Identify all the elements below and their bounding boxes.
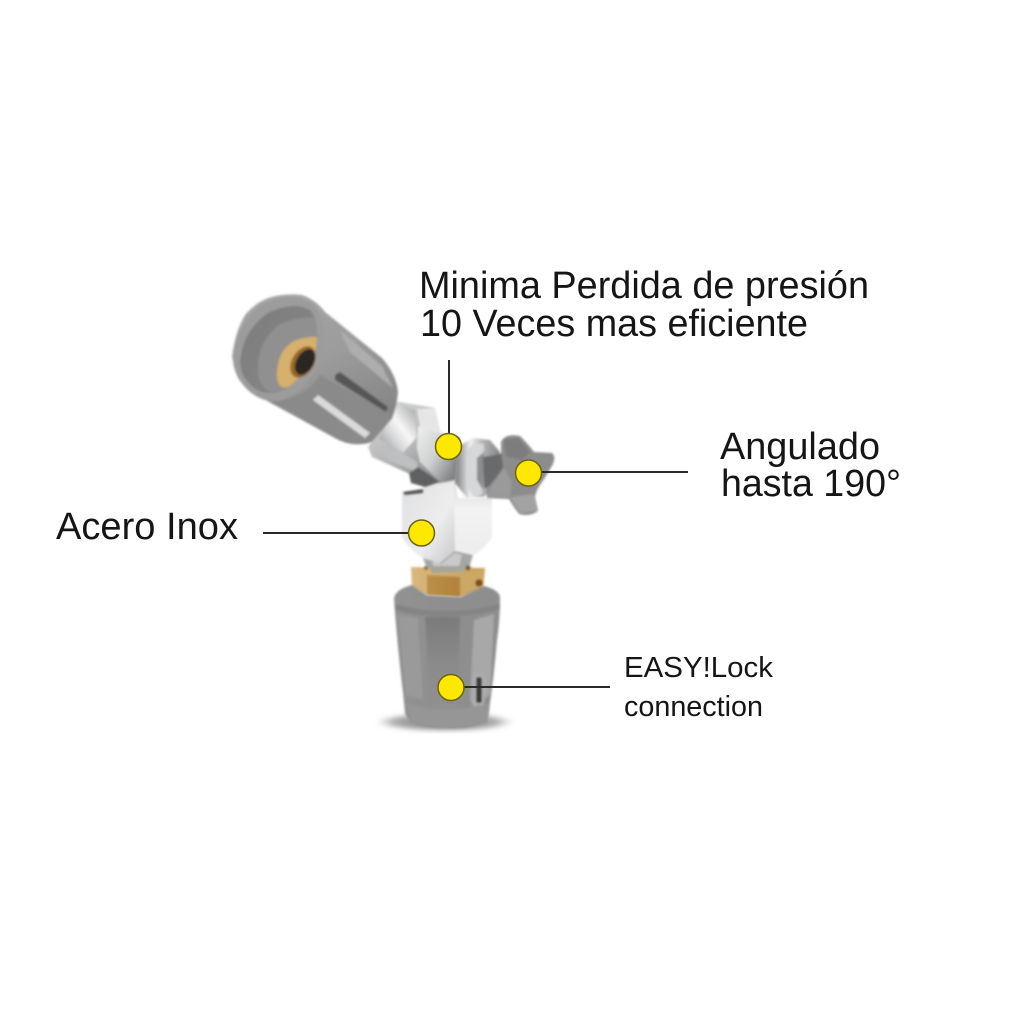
shadow under base	[375, 712, 515, 732]
leader: angle	[529, 471, 688, 473]
leader: pressure	[448, 360, 450, 445]
nozzle inner shelf	[258, 318, 317, 392]
label: lock line 1: EASY!Lock	[624, 652, 774, 684]
icon: grey nozzle body	[232, 294, 398, 444]
nozzle bowl	[240, 306, 317, 393]
marker: angle	[516, 460, 542, 486]
nozzle dark slot	[335, 372, 388, 412]
icon: EASY!Lock grey collar	[394, 585, 500, 728]
leader: steel	[263, 532, 423, 534]
label: steel: Acero Inox	[56, 506, 238, 548]
label: efficiency: 10 Veces mas eficiente	[420, 303, 808, 345]
metal block	[402, 478, 492, 571]
brass insert	[277, 337, 317, 388]
leader lines	[263, 360, 688, 687]
product: angled nozzle adapter	[232, 294, 554, 732]
knob collar	[455, 438, 510, 498]
marker dots	[408, 434, 542, 700]
marker: lock	[438, 674, 464, 700]
nozzle underside shade	[262, 375, 393, 444]
label: pressure: Minima Perdida de presión	[419, 265, 869, 307]
metal neck cylinder	[379, 402, 417, 453]
leader: lock	[451, 686, 610, 688]
marker: pressure	[436, 434, 462, 460]
nozzle light slot	[313, 395, 370, 438]
metal bracket plate	[368, 402, 460, 495]
label: angle line 1: Angulado	[720, 426, 880, 468]
icon: star knob	[487, 435, 554, 515]
marker: steel	[408, 520, 434, 546]
nozzle upper flute	[340, 330, 393, 388]
label: angle line 2: hasta 190°	[721, 463, 901, 505]
brass hex nut	[411, 566, 485, 597]
label: lock line 2: connection	[624, 691, 763, 723]
nozzle rim	[233, 297, 324, 401]
